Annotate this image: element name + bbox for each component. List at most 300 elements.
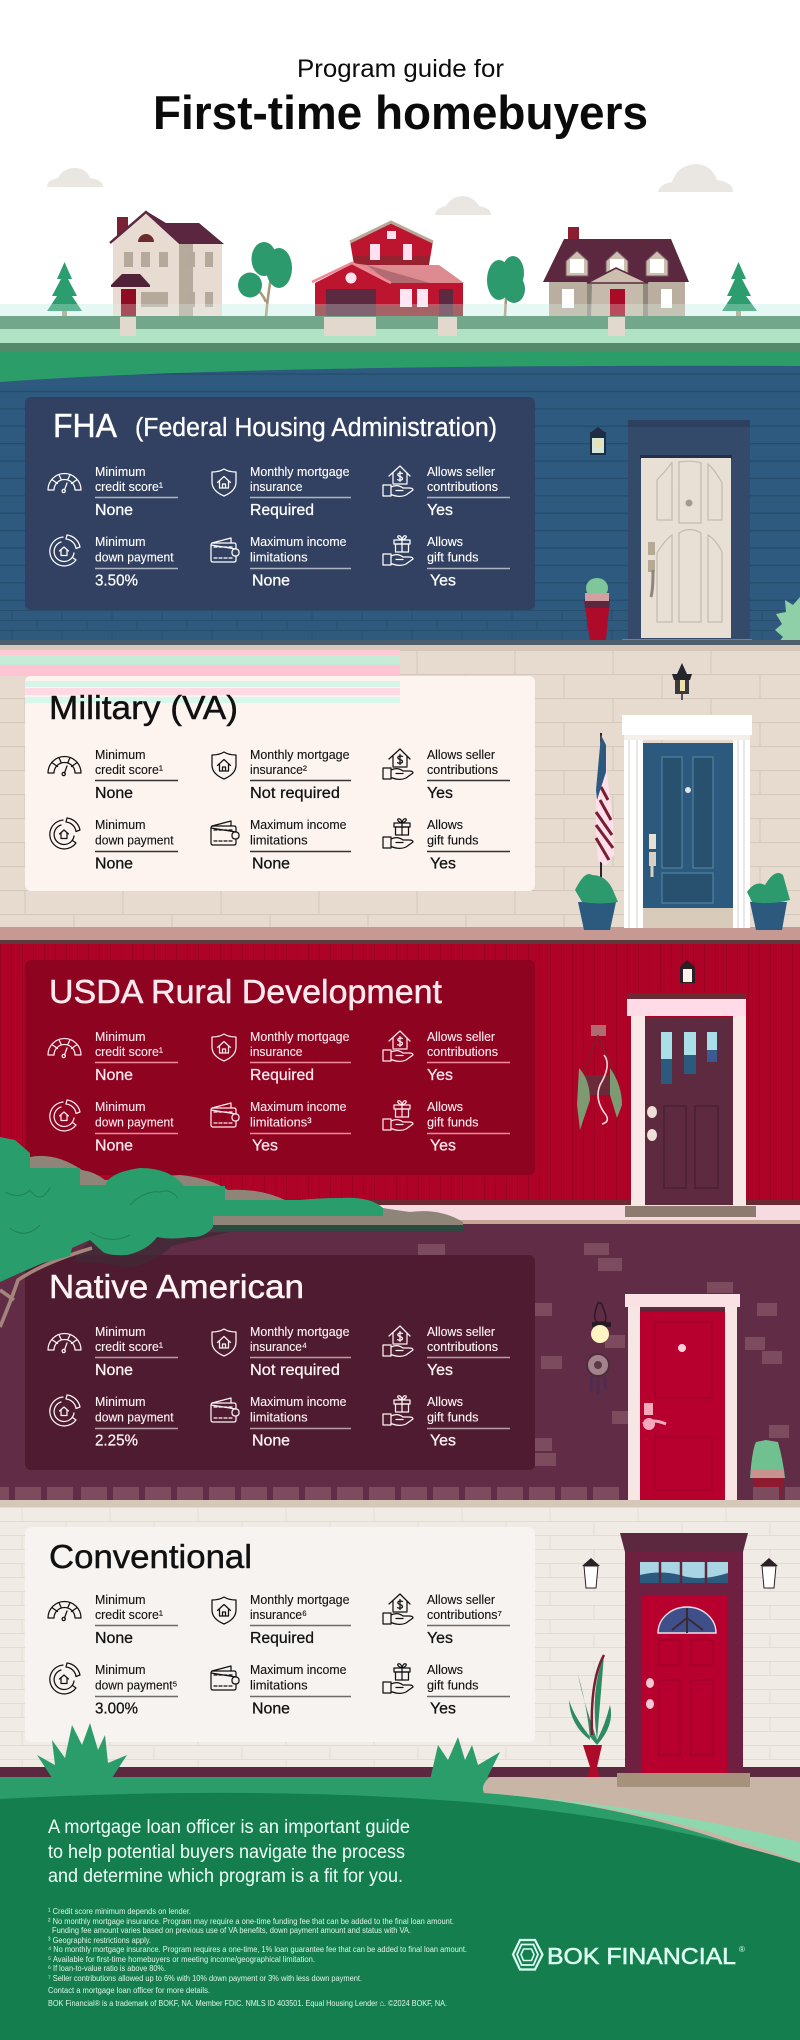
vase plant	[569, 1655, 611, 1780]
label: down payment: down payment	[95, 832, 174, 848]
closing message	[48, 1817, 410, 1887]
icon: gift in hand	[383, 819, 413, 848]
metric: income limitations	[211, 534, 351, 590]
panel: Native American	[25, 1255, 535, 1470]
value: Yes	[430, 572, 456, 590]
rule	[95, 1132, 178, 1134]
label: seller contributions: Allows seller	[427, 1592, 496, 1607]
label: gift funds: Allows	[427, 1099, 463, 1114]
label: seller contributions: contributions	[427, 1339, 498, 1354]
door: cream	[641, 458, 731, 638]
icon: wallet	[211, 1103, 239, 1127]
rule	[95, 1062, 178, 1064]
label: seller contributions	[427, 464, 498, 494]
registered mark: ®	[739, 1945, 745, 1954]
rule	[427, 1132, 510, 1134]
rule	[250, 1062, 351, 1064]
footnotes: ⁷ Seller contributions allowed up to 6% with 10% down payment or 3% with less down payment.	[48, 1973, 362, 1983]
label: gift funds: Allows	[427, 1394, 463, 1409]
wall lamp right	[760, 1558, 778, 1588]
label: seller contributions: contributions	[427, 762, 498, 777]
label: credit score: credit score¹	[95, 1607, 164, 1622]
canopy: leaf outlines	[5, 1188, 178, 1239]
label: income limitations	[250, 1099, 346, 1130]
value: Yes	[430, 1138, 456, 1154]
rule	[95, 850, 178, 852]
metric: income limitations	[211, 1662, 351, 1718]
rule	[95, 1356, 178, 1358]
metric: gift funds	[383, 1099, 510, 1154]
label: down payment: Minimum	[95, 1394, 146, 1409]
value: Not required	[250, 1362, 340, 1379]
label: down payment	[95, 534, 174, 564]
label: down payment: Minimum	[95, 1662, 146, 1677]
rule	[427, 568, 510, 570]
panel: Conventional	[25, 1527, 535, 1742]
metric: seller contributions	[383, 1029, 510, 1084]
label: credit score	[95, 747, 164, 777]
value: None	[95, 785, 133, 802]
label: income limitations: limitations	[250, 1410, 308, 1424]
door surround	[622, 715, 752, 928]
label: down payment: Minimum	[95, 534, 146, 549]
label: down payment	[95, 1394, 174, 1424]
metric: down payment	[50, 1394, 178, 1450]
icon: house in hand	[383, 1594, 413, 1624]
metric: down payment	[50, 534, 178, 590]
rule	[427, 1696, 510, 1698]
subtitle: Program guide for	[297, 55, 504, 83]
value: Yes	[427, 785, 453, 802]
logo: BOK Financial	[513, 1940, 745, 1970]
label: seller contributions: Allows seller	[427, 464, 496, 479]
plant pot left	[575, 874, 618, 930]
metric: credit score	[48, 464, 178, 519]
icon: gift in hand	[383, 1396, 413, 1425]
label: down payment: down payment	[95, 550, 174, 564]
label: mortgage insurance	[250, 1029, 350, 1059]
heading: FHA	[53, 407, 497, 444]
grass tuft right	[430, 1737, 500, 1782]
metric: down payment	[50, 1099, 178, 1154]
rule	[250, 568, 351, 570]
value: None	[252, 1432, 290, 1450]
heading: Military (VA): Military (VA)	[49, 689, 238, 726]
label: mortgage insurance: insurance⁴	[250, 1339, 307, 1354]
lawn bands	[0, 316, 800, 382]
label: mortgage insurance: Monthly mortgage	[250, 1324, 350, 1339]
metrics: FHA	[48, 464, 510, 590]
label: income limitations: limitations	[250, 832, 308, 848]
closing message: to help potential buyers navigate the process	[48, 1842, 405, 1863]
tree canopy over USDA and Native panels	[0, 1137, 463, 1327]
pine tree right	[722, 262, 757, 317]
value: Required	[250, 1067, 314, 1084]
label: seller contributions	[427, 747, 498, 777]
icon: gauge	[48, 1602, 81, 1621]
label: gift funds: gift funds	[427, 1410, 479, 1424]
label: gift funds: Allows	[427, 534, 463, 549]
value: Yes	[427, 1067, 453, 1084]
label: mortgage insurance: insurance²	[250, 762, 308, 777]
label: income limitations: limitations	[250, 550, 308, 564]
value: None	[95, 1067, 133, 1084]
metric: income limitations	[211, 1099, 351, 1154]
rule	[250, 1132, 351, 1134]
label: down payment	[95, 1662, 178, 1692]
door: maroon	[645, 1017, 733, 1205]
label: down payment	[95, 817, 174, 848]
metric: income limitations	[211, 817, 351, 872]
label: mortgage insurance	[250, 747, 350, 777]
haze behind houses	[0, 304, 800, 316]
label: down payment: down payment⁵	[95, 1678, 178, 1692]
footnotes: ¹ Credit score minimum depends on lender.	[48, 1906, 191, 1916]
icon: gauge	[48, 756, 81, 776]
sidewalk band	[0, 1500, 800, 1507]
driveway	[480, 1777, 800, 1867]
rule	[250, 1624, 351, 1626]
label: mortgage insurance	[250, 1592, 350, 1622]
metric: gift funds	[383, 1394, 510, 1450]
dark green footer	[0, 1793, 800, 2040]
heading: USDA Rural Development: USDA Rural Development	[49, 973, 442, 1010]
footnotes: Contact a mortgage loan officer for more details.	[48, 1985, 210, 1995]
label: income limitations: Maximum income	[250, 534, 346, 549]
rule	[250, 850, 351, 852]
canopy: grey far foliage	[30, 1156, 463, 1226]
footnotes: ² No monthly mortgage insurance. Program may require a one-time funding fee that can be added to the final loan amount.	[48, 1916, 454, 1926]
roof trim	[0, 940, 800, 944]
base band	[0, 927, 800, 940]
section: Native American	[0, 1224, 800, 1500]
heading: Native American: Native American	[49, 1268, 304, 1305]
label: credit score: credit score¹	[95, 479, 164, 494]
icon: ring with house	[50, 535, 80, 566]
label: down payment: Minimum	[95, 1099, 146, 1114]
haze overlay on house bases	[0, 304, 800, 316]
plant pot right	[747, 873, 790, 930]
value: Required	[250, 1630, 314, 1647]
logo wordmark: BOK FINANCIAL	[547, 1943, 736, 1969]
metric: seller contributions	[383, 1324, 510, 1379]
ground strip below canopy	[213, 1225, 463, 1231]
label: gift funds: gift funds	[427, 550, 479, 564]
American flag	[596, 733, 614, 886]
wall lamp	[672, 663, 692, 700]
metric: down payment	[50, 1662, 178, 1718]
metrics: Conventional	[48, 1592, 510, 1718]
rule	[250, 1428, 351, 1430]
icon: gift in hand	[383, 536, 413, 565]
label: gift funds	[427, 1099, 479, 1130]
label: credit score	[95, 1592, 164, 1622]
grass tuft left	[37, 1723, 127, 1778]
rule	[427, 1356, 510, 1358]
main title: First-time homebuyers	[153, 86, 648, 139]
value: Yes	[427, 1362, 453, 1379]
footnotes	[48, 1906, 467, 2008]
metrics: USDA	[48, 1029, 510, 1154]
label: seller contributions	[427, 1592, 502, 1622]
wall: white brick	[0, 1507, 800, 1767]
rule	[250, 496, 351, 498]
door surround	[625, 1294, 740, 1500]
tree branches	[0, 1248, 92, 1327]
door surround	[620, 1533, 748, 1777]
icon: shield	[212, 1597, 236, 1624]
trim and sidewalk	[0, 1200, 800, 1224]
value: None	[252, 856, 290, 872]
rule	[250, 780, 351, 782]
label: income limitations: Maximum income	[250, 817, 346, 832]
label: seller contributions: Allows seller	[427, 1324, 496, 1339]
label: mortgage insurance: insurance	[250, 479, 302, 494]
mint lawn edge	[484, 1793, 800, 1862]
metric: credit score	[48, 1324, 178, 1379]
label: credit score: credit score¹	[95, 1044, 164, 1059]
label: credit score	[95, 1029, 164, 1059]
rule	[95, 1624, 178, 1626]
value: Yes	[430, 1432, 456, 1450]
metric: credit score	[48, 1592, 178, 1647]
wall: tan brick	[0, 640, 800, 927]
walkways	[120, 317, 625, 336]
label: seller contributions: Allows seller	[427, 747, 496, 762]
logo mark: nested hexagons	[513, 1940, 542, 1970]
rule	[427, 1062, 510, 1064]
label: down payment: down payment	[95, 1410, 174, 1424]
value: Yes	[430, 1700, 456, 1718]
label: seller contributions: contributions	[427, 1044, 498, 1059]
label: gift funds: Allows	[427, 817, 463, 832]
icon: ring with house	[50, 1395, 80, 1426]
value: None	[252, 1700, 290, 1718]
panel: USDA	[25, 960, 535, 1175]
heading acronym: FHA	[53, 407, 117, 444]
icon: shield	[212, 1034, 236, 1061]
light green lawn	[0, 1777, 800, 1900]
section: USDA Rural Development	[0, 940, 800, 1224]
door: blue	[643, 743, 733, 928]
value: None	[252, 572, 290, 590]
dark base band	[0, 1767, 800, 1777]
label: mortgage insurance: Monthly mortgage	[250, 1029, 350, 1044]
label: down payment	[95, 1099, 174, 1130]
label: seller contributions: contributions	[427, 479, 498, 494]
step	[622, 639, 752, 649]
label: seller contributions: Allows seller	[427, 1029, 496, 1044]
icon: shield	[212, 1329, 236, 1356]
label: gift funds: Allows	[427, 1662, 463, 1677]
door surround	[627, 993, 746, 1206]
bricks band	[0, 1487, 800, 1500]
value: Yes	[430, 856, 456, 872]
sidewalk edge	[0, 640, 800, 650]
value: None	[95, 1138, 133, 1154]
metric: gift funds	[383, 817, 510, 872]
background sky	[0, 0, 800, 320]
value: Yes	[252, 1138, 278, 1154]
icon: house in hand	[383, 466, 413, 496]
label: gift funds: gift funds	[427, 1114, 479, 1130]
label: income limitations: limitations	[250, 1678, 308, 1692]
label: mortgage insurance: Monthly mortgage	[250, 1592, 350, 1607]
label: credit score	[95, 1324, 164, 1354]
label: credit score: Minimum	[95, 1324, 146, 1339]
value: Not required	[250, 785, 340, 802]
house: maroon roof with dormers	[543, 227, 689, 317]
rule	[95, 568, 178, 570]
metric: income limitations	[211, 1394, 351, 1450]
potted plant	[584, 578, 610, 649]
icon: house in hand	[383, 1326, 413, 1356]
label: mortgage insurance: insurance⁶	[250, 1607, 307, 1622]
canopy: green foliage	[0, 1137, 383, 1282]
icon: house in hand	[383, 1031, 413, 1061]
metrics: Military	[48, 747, 510, 872]
panel: FHA	[25, 397, 535, 610]
footnotes: ³ Geographic restrictions apply.	[48, 1935, 151, 1945]
label: income limitations: Maximum income	[250, 1394, 346, 1409]
icon: ring with house	[50, 1100, 80, 1131]
wall lamp	[680, 960, 695, 983]
rule	[250, 1696, 351, 1698]
footer ground	[0, 1773, 800, 2040]
door: red	[640, 1309, 725, 1500]
loose bricks	[418, 1243, 789, 1466]
round tree right	[487, 256, 525, 316]
heading: Conventional: Conventional	[49, 1538, 252, 1575]
value: 2.25%	[95, 1432, 138, 1450]
icon: shield	[212, 752, 236, 779]
wall: maroon	[0, 1224, 800, 1500]
label: gift funds	[427, 534, 479, 564]
rule	[427, 780, 510, 782]
label: credit score: Minimum	[95, 464, 146, 479]
metric: gift funds	[383, 1662, 510, 1718]
metrics: Native American	[48, 1324, 510, 1450]
house: red barn style	[312, 222, 464, 317]
footnotes: ⁵ Available for first-time homebuyers or meeting income/geographical limitation.	[48, 1954, 315, 1964]
label: down payment: down payment	[95, 1114, 174, 1130]
label: income limitations: Maximum income	[250, 1099, 346, 1114]
metric: seller contributions	[383, 747, 510, 802]
icon: shield	[212, 469, 236, 496]
label: income limitations: Maximum income	[250, 1662, 346, 1677]
label: income limitations	[250, 1662, 346, 1692]
value: 3.00%	[95, 1700, 138, 1718]
label: seller contributions: contributions⁷	[427, 1607, 502, 1622]
value: Yes	[427, 502, 453, 519]
icon: gauge	[48, 1038, 81, 1058]
metric: mortgage insurance	[212, 464, 351, 519]
label: mortgage insurance: Monthly mortgage	[250, 464, 350, 479]
label: mortgage insurance: insurance	[250, 1044, 302, 1059]
label: income limitations	[250, 1394, 346, 1424]
step	[625, 1206, 756, 1217]
footnotes: ⁶ If loan-to-value ratio is above 80%.	[48, 1963, 166, 1973]
section: FHA	[0, 366, 800, 649]
value: Required	[250, 502, 314, 519]
clouds	[47, 164, 733, 215]
label: credit score: Minimum	[95, 1592, 146, 1607]
round tree left	[238, 242, 292, 317]
value: None	[95, 502, 133, 519]
icon: wallet	[211, 1666, 239, 1690]
rule	[427, 1428, 510, 1430]
icon: gift in hand	[383, 1664, 413, 1693]
pine tree left	[47, 262, 82, 317]
hanging plant	[577, 1025, 622, 1130]
icon: wallet	[211, 538, 239, 562]
label: mortgage insurance	[250, 464, 350, 494]
metric: down payment	[50, 817, 178, 872]
rule	[250, 1356, 351, 1358]
wall: red siding	[0, 940, 800, 1202]
icon: house in hand	[383, 749, 413, 779]
label: gift funds: gift funds	[427, 832, 479, 848]
value: Yes	[427, 1630, 453, 1647]
metric: seller contributions	[383, 464, 510, 519]
metric: credit score	[48, 747, 178, 802]
door frame	[628, 420, 750, 640]
dreamcatcher	[587, 1354, 609, 1395]
value: 3.50%	[95, 572, 138, 590]
rule	[427, 496, 510, 498]
label: mortgage insurance	[250, 1324, 350, 1354]
icon: gauge	[48, 1334, 81, 1353]
metric: mortgage insurance	[212, 1324, 351, 1379]
icon: ring with house	[50, 818, 80, 849]
section: Military (VA)	[0, 640, 800, 940]
label: gift funds	[427, 817, 479, 848]
metric: mortgage insurance	[212, 1592, 351, 1647]
icon: ring with house	[50, 1663, 80, 1694]
metric: gift funds	[383, 534, 510, 590]
wall lamp	[591, 1303, 611, 1343]
label: income limitations: limitations³	[250, 1114, 312, 1130]
closing message: A mortgage loan officer is an important guide	[48, 1817, 410, 1838]
house: cream two-storey	[110, 211, 224, 317]
rule	[95, 496, 178, 498]
value: None	[95, 1630, 133, 1647]
label: credit score: credit score¹	[95, 762, 164, 777]
rule	[95, 1428, 178, 1430]
icon: gauge	[48, 474, 81, 493]
metric: seller contributions	[383, 1592, 510, 1647]
wall lamp left	[582, 1558, 600, 1588]
value: None	[95, 856, 133, 872]
heading full name: (Federal Housing Administration)	[135, 414, 497, 442]
label: credit score: Minimum	[95, 1029, 146, 1044]
label: down payment: Minimum	[95, 817, 146, 832]
value: None	[95, 1362, 133, 1379]
icon: gift in hand	[383, 1101, 413, 1130]
rule	[427, 850, 510, 852]
label: gift funds: gift funds	[427, 1678, 479, 1692]
wall: blue siding	[0, 366, 800, 610]
metric: mortgage insurance	[212, 1029, 351, 1084]
closing message: and determine which program is a fit for you.	[48, 1866, 403, 1887]
metric: mortgage insurance	[212, 747, 351, 802]
label: gift funds	[427, 1662, 479, 1692]
panel: Military	[25, 676, 535, 891]
rule	[95, 780, 178, 782]
footnotes: BOK Financial® is a trademark of BOKF, NA. Member FDIC. NMLS ID 403501. Equal Housing Lender ⌂. ©2024 BOKF, NA.	[48, 1998, 447, 2008]
metric: credit score	[48, 1029, 178, 1084]
door: red with arched window	[641, 1595, 727, 1773]
